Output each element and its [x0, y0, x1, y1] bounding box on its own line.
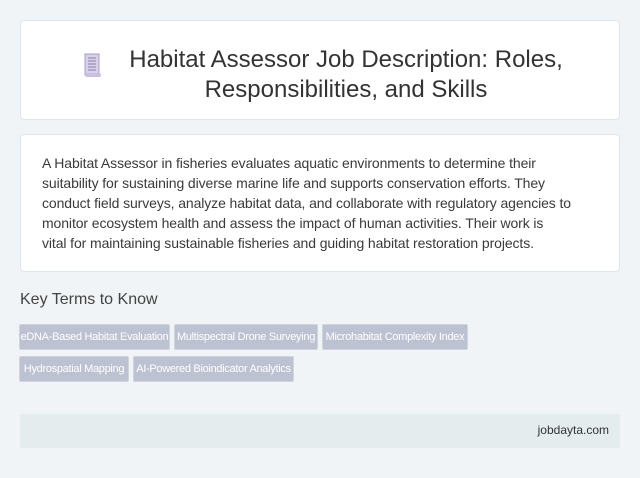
description text: monitor ecosystem health and assess the impact of human activities. Their work is	[42, 215, 543, 231]
description card	[20, 134, 620, 272]
footer text: jobdayta.com	[538, 423, 609, 437]
description text: suitability for sustaining diverse marine life and supports conservation efforts. They	[42, 175, 545, 191]
description text	[42, 155, 571, 251]
heading: key terms: Key Terms to Know	[20, 291, 158, 308]
description text: A Habitat Assessor in fisheries evaluates aquatic environments to determine their	[42, 155, 536, 171]
tags: Hydrospatial Mapping	[24, 363, 124, 375]
description text: vital for maintaining sustainable fisheries and guiding habitat restoration projects.	[42, 235, 534, 251]
tags: Multispectral Drone Surveying	[177, 331, 315, 343]
footer	[20, 414, 620, 448]
tags: Microhabitat Complexity Index	[326, 331, 464, 343]
tags: AI-Powered Bioindicator Analytics	[136, 363, 291, 375]
tags: eDNA-Based Habitat Evaluation	[21, 331, 168, 343]
header card	[20, 20, 620, 120]
icon: document	[84, 54, 101, 77]
description text: conduct field surveys, analyze habitat data, and collaborate with regulatory agencies to	[42, 195, 571, 211]
title: Habitat Assessor Job Description: Roles, Responsibilities, and Skills	[129, 46, 563, 103]
